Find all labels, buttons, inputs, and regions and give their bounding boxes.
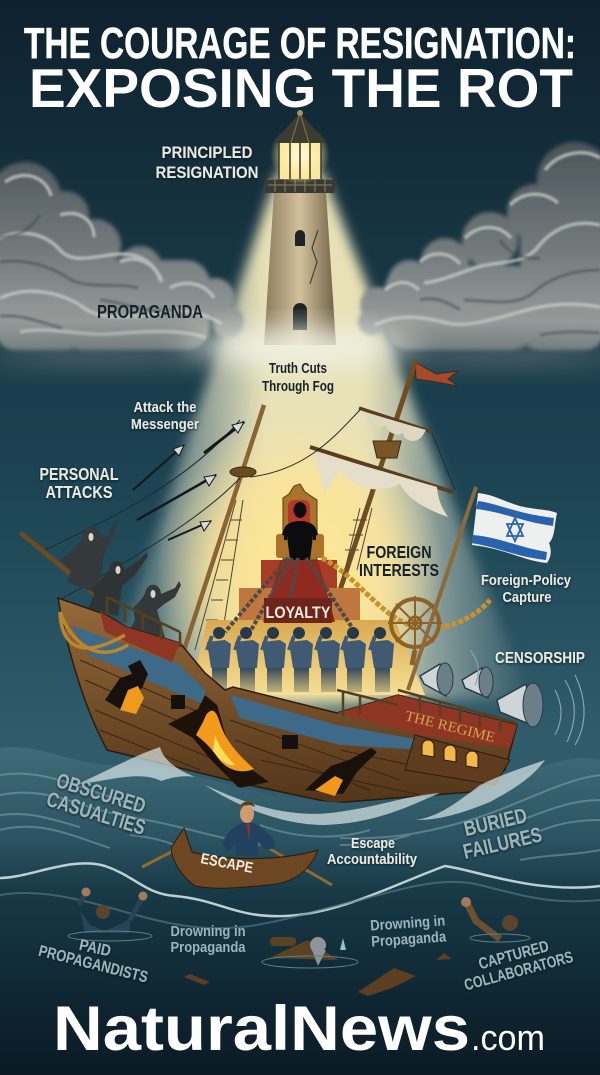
deck rails bbox=[107, 597, 517, 732]
label: loyalty bbox=[264, 598, 332, 623]
mast: front bbox=[184, 405, 264, 650]
label: obscured casualties: OBSCURED bbox=[54, 769, 148, 818]
label: obscured casualties bbox=[44, 769, 148, 840]
label: personal attacks: ATTACKS bbox=[46, 482, 112, 502]
rigging lines bbox=[40, 410, 455, 600]
cloud: right bbox=[358, 142, 600, 350]
label: foreign-policy capture: Foreign-Policy bbox=[481, 572, 572, 589]
label: escape accountability: Accountability bbox=[327, 851, 418, 868]
light beam bbox=[100, 170, 530, 740]
label: truth cuts through fog: Truth Cuts bbox=[269, 361, 327, 377]
oars bbox=[142, 842, 332, 885]
sea bbox=[0, 747, 600, 1075]
label: propaganda: PROPAGANDA bbox=[97, 302, 203, 322]
label: foreign-policy capture: Capture bbox=[502, 589, 552, 606]
fog band bbox=[0, 330, 600, 364]
pyramid steps bbox=[190, 560, 425, 695]
label: drowning left: Drowning in bbox=[170, 923, 246, 940]
label: loyalty: LOYALTY bbox=[266, 603, 331, 622]
saluting soldiers bbox=[207, 627, 394, 692]
attacker two bbox=[88, 553, 148, 616]
label: censorship: CENSORSHIP bbox=[495, 650, 585, 667]
label: principled resignation: RESIGNATION bbox=[156, 163, 258, 182]
label: escape accountability: Escape bbox=[351, 835, 395, 852]
label: the regime: THE REGIME bbox=[403, 708, 497, 746]
rowboat with escaping man bbox=[142, 802, 332, 888]
lighthouse bbox=[264, 110, 336, 345]
title bbox=[24, 19, 576, 119]
loyalty chains bbox=[225, 558, 355, 632]
label: truth cuts through fog: Through Fog bbox=[262, 379, 334, 395]
drowning figure: left bbox=[68, 888, 152, 941]
label: personal attacks: PERSONAL bbox=[40, 464, 119, 484]
label: paid propagandists: PAID bbox=[78, 937, 112, 960]
stern cabin with windows bbox=[405, 735, 510, 785]
hull blue band bbox=[70, 625, 425, 750]
hull plank lines bbox=[80, 660, 420, 795]
bow rope ornament bbox=[60, 612, 128, 652]
logo: NaturalNews.com: NaturalNews bbox=[53, 994, 470, 1064]
megaphones bbox=[420, 650, 584, 745]
mast: rear with yards and sails bbox=[310, 360, 453, 590]
man in suit bbox=[222, 802, 276, 856]
label: paid propagandists: PROPAGANDISTS bbox=[37, 943, 150, 986]
flag: top pennant bbox=[415, 362, 458, 386]
drowning figure: middle bbox=[262, 937, 358, 968]
label: obscured casualties: CASUALTIES bbox=[44, 788, 148, 840]
wave crests bbox=[75, 747, 545, 825]
label: attack the messenger: Messenger bbox=[131, 416, 199, 433]
hull red band bbox=[100, 612, 517, 748]
label: captured collaborators: CAPTURED bbox=[477, 938, 551, 973]
ship hull bbox=[58, 597, 517, 803]
cloud silhouette bbox=[0, 162, 244, 350]
throne and seated figure bbox=[276, 484, 324, 560]
drowning figure: right bbox=[461, 897, 530, 942]
attacker three bbox=[127, 581, 181, 652]
label: principled resignation: PRINCIPLED bbox=[162, 143, 252, 162]
label: escape: ESCAPE bbox=[199, 850, 254, 877]
lighthouse tower bbox=[264, 192, 336, 345]
label: drowning right bbox=[370, 912, 447, 951]
label: attack the messenger: Attack the bbox=[134, 399, 196, 416]
label: buried failures bbox=[461, 804, 544, 864]
logo: NaturalNews.com: .com bbox=[471, 1017, 545, 1058]
bowsprit bbox=[22, 534, 108, 605]
flag pole bbox=[408, 487, 476, 690]
arrows bbox=[133, 422, 244, 540]
hooded attackers bbox=[60, 522, 181, 652]
label: buried failures: FAILURES bbox=[461, 823, 544, 864]
lantern room bbox=[265, 110, 335, 193]
ship wheel bbox=[388, 596, 442, 665]
boat body bbox=[171, 828, 318, 888]
floating debris bbox=[184, 953, 452, 996]
label: foreign interests: INTERESTS bbox=[359, 560, 439, 580]
label: buried failures: BURIED bbox=[462, 804, 529, 841]
title: EXPOSING THE ROT bbox=[29, 57, 573, 119]
label: drowning right: Propaganda bbox=[371, 928, 447, 951]
lighthouse windows bbox=[293, 230, 307, 330]
label: drowning right: Drowning in bbox=[370, 912, 446, 935]
gold chain to wheel bbox=[322, 558, 490, 628]
cloud swirl highlights bbox=[0, 175, 222, 338]
cloud: left bbox=[0, 162, 244, 350]
cloud swirl highlights bbox=[375, 153, 600, 325]
label: drowning left: Propaganda bbox=[170, 939, 246, 956]
label: paid propagandists bbox=[37, 937, 150, 986]
attacker one bbox=[60, 522, 117, 592]
lower wave line bbox=[0, 863, 600, 916]
flag: Israel bbox=[471, 493, 557, 563]
label: foreign interests: FOREIGN bbox=[366, 542, 432, 562]
cloud silhouette bbox=[358, 142, 600, 350]
hull damage and fire bbox=[105, 660, 377, 796]
